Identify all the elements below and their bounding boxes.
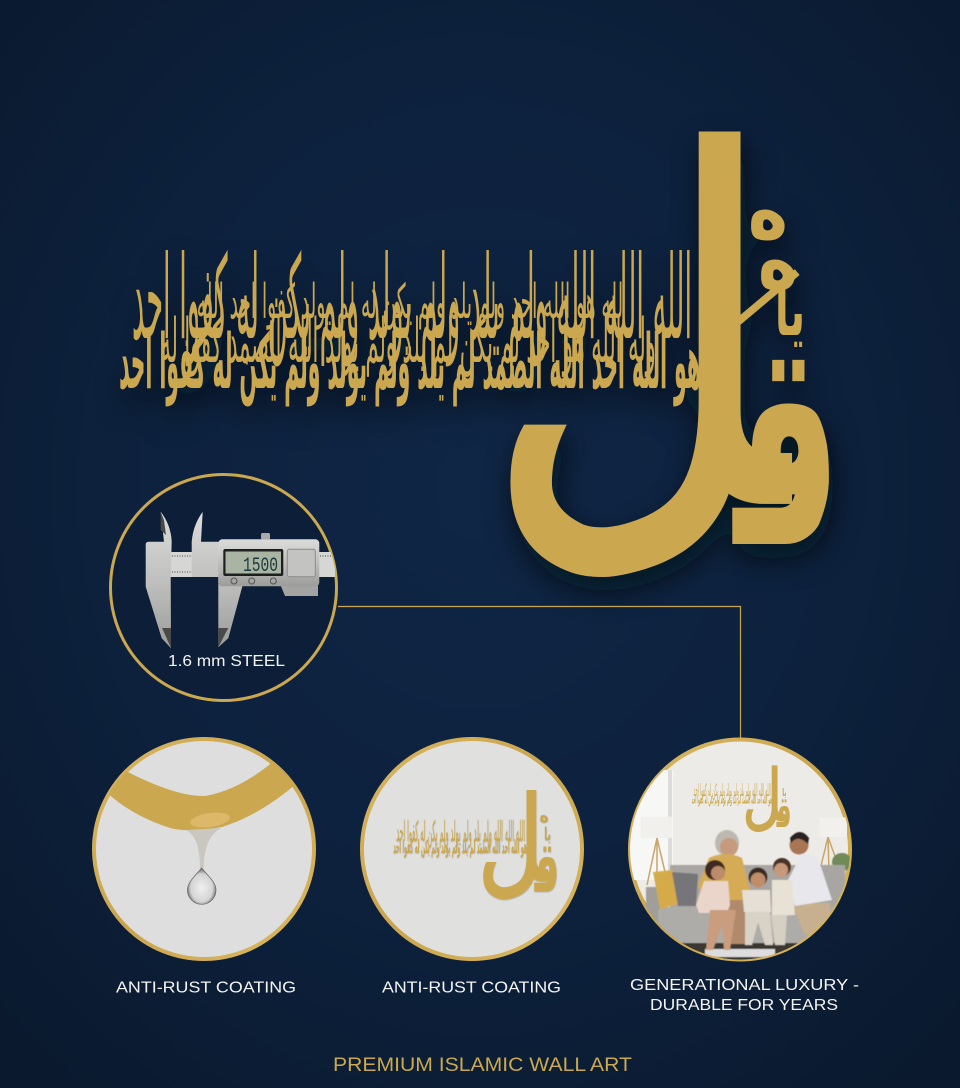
caption: anti-rust coating second: ANTI-RUST COATING (382, 980, 561, 996)
floor lamps (641, 817, 847, 885)
icon: digital caliper: 1500 (243, 555, 278, 578)
small calligraphy: verse upper: الله الله الله ولم يلد ولم يولد ولم يكن له كفوا احد (396, 815, 525, 848)
wall calligraphy: qaf: ق‍ (776, 788, 792, 838)
calligraphy: large lam: ‍ل (486, 54, 794, 614)
droplet thread (186, 828, 221, 870)
calligraphy: verse small interlace: لله هو الله احد ولم يلد ولم يكن له لم يولد كفوا احد الله (197, 273, 623, 330)
scene: sofa and family (646, 830, 850, 960)
cushions (653, 870, 678, 909)
calligraphy: verse lower row: هو الله احد الله الصمد لم يلد ولم يولد ولم يكن له كفوا احد (119, 318, 701, 407)
wall calligraphy: verse upper: الله الله الله ولم يلد ولم يولد ولم يكن له كفوا احد (694, 780, 771, 802)
caption: anti-rust coating: ANTI-RUST COATING (116, 980, 296, 996)
sofa (670, 864, 846, 908)
small calligraphy: qaf: ق‍ (534, 827, 560, 909)
middle boy (742, 868, 773, 945)
panel: anti-rust coating droplet (94, 739, 314, 959)
wall calligraphy: verse lower: هو الله احد الله الصمد لم يلد ولم يولد ولم يكن له كفوا احد (692, 793, 772, 808)
panel: family on sofa (620, 740, 860, 963)
wall calligraphy: ya mark: يا (782, 787, 786, 800)
caption: generational luxury: DURABLE FOR YEARS (650, 997, 838, 1014)
window (628, 770, 673, 880)
small calligraphy: lam: ‍ل (478, 771, 548, 909)
calligraphy artwork: Surah Al-Ikhlas (119, 54, 842, 614)
calligraphy: large qaf: ق‍ (732, 275, 842, 613)
small calligraphy: ya mark: يا (544, 825, 551, 845)
panel: product on white wall (362, 739, 582, 959)
father (788, 832, 832, 935)
calligraphy: ya mark: يا (775, 268, 805, 352)
girl (696, 860, 736, 950)
small calligraphy: ha mark: ه (539, 805, 549, 827)
droplet (187, 868, 216, 904)
grandmother (698, 830, 750, 944)
plant (832, 853, 852, 871)
calligraphy: lower ha mark: ه (758, 214, 798, 307)
caption: generational luxury (630, 977, 859, 1014)
right boy (771, 858, 795, 945)
icon: digital caliper (146, 512, 335, 648)
wall calligraphy (692, 755, 792, 839)
connector line (338, 606, 740, 740)
label: 1.6 mm steel: 1.6 mm STEEL (168, 653, 285, 670)
floor (682, 942, 798, 960)
caption: generational luxury: GENERATIONAL LUXURY - (630, 977, 859, 994)
calligraphy: verse upper row: الله الله الله ولم يلد ولم يولد ولم يكن له كفوا احد (132, 231, 692, 367)
footer heading: PREMIUM ISLAMIC WALL ART (333, 1054, 632, 1076)
calligraphy: diagonal stroke: ـــــ (668, 232, 810, 366)
calligraphy: upper ha mark: ه (748, 164, 788, 257)
gold band (104, 760, 296, 830)
wall calligraphy: lam: ‍ل (742, 755, 784, 839)
small calligraphy: verse lower: هو الله احد الله الصمد لم يلد ولم يولد ولم يكن له كفوا احد (393, 837, 527, 859)
oil highlight (190, 812, 230, 828)
panel: caliper circle (110, 474, 336, 700)
calligraphy: verse middle row: وله الله هو احد لم يكن لم يلد ولم يولد الله الصمد كفوا له (160, 306, 656, 378)
